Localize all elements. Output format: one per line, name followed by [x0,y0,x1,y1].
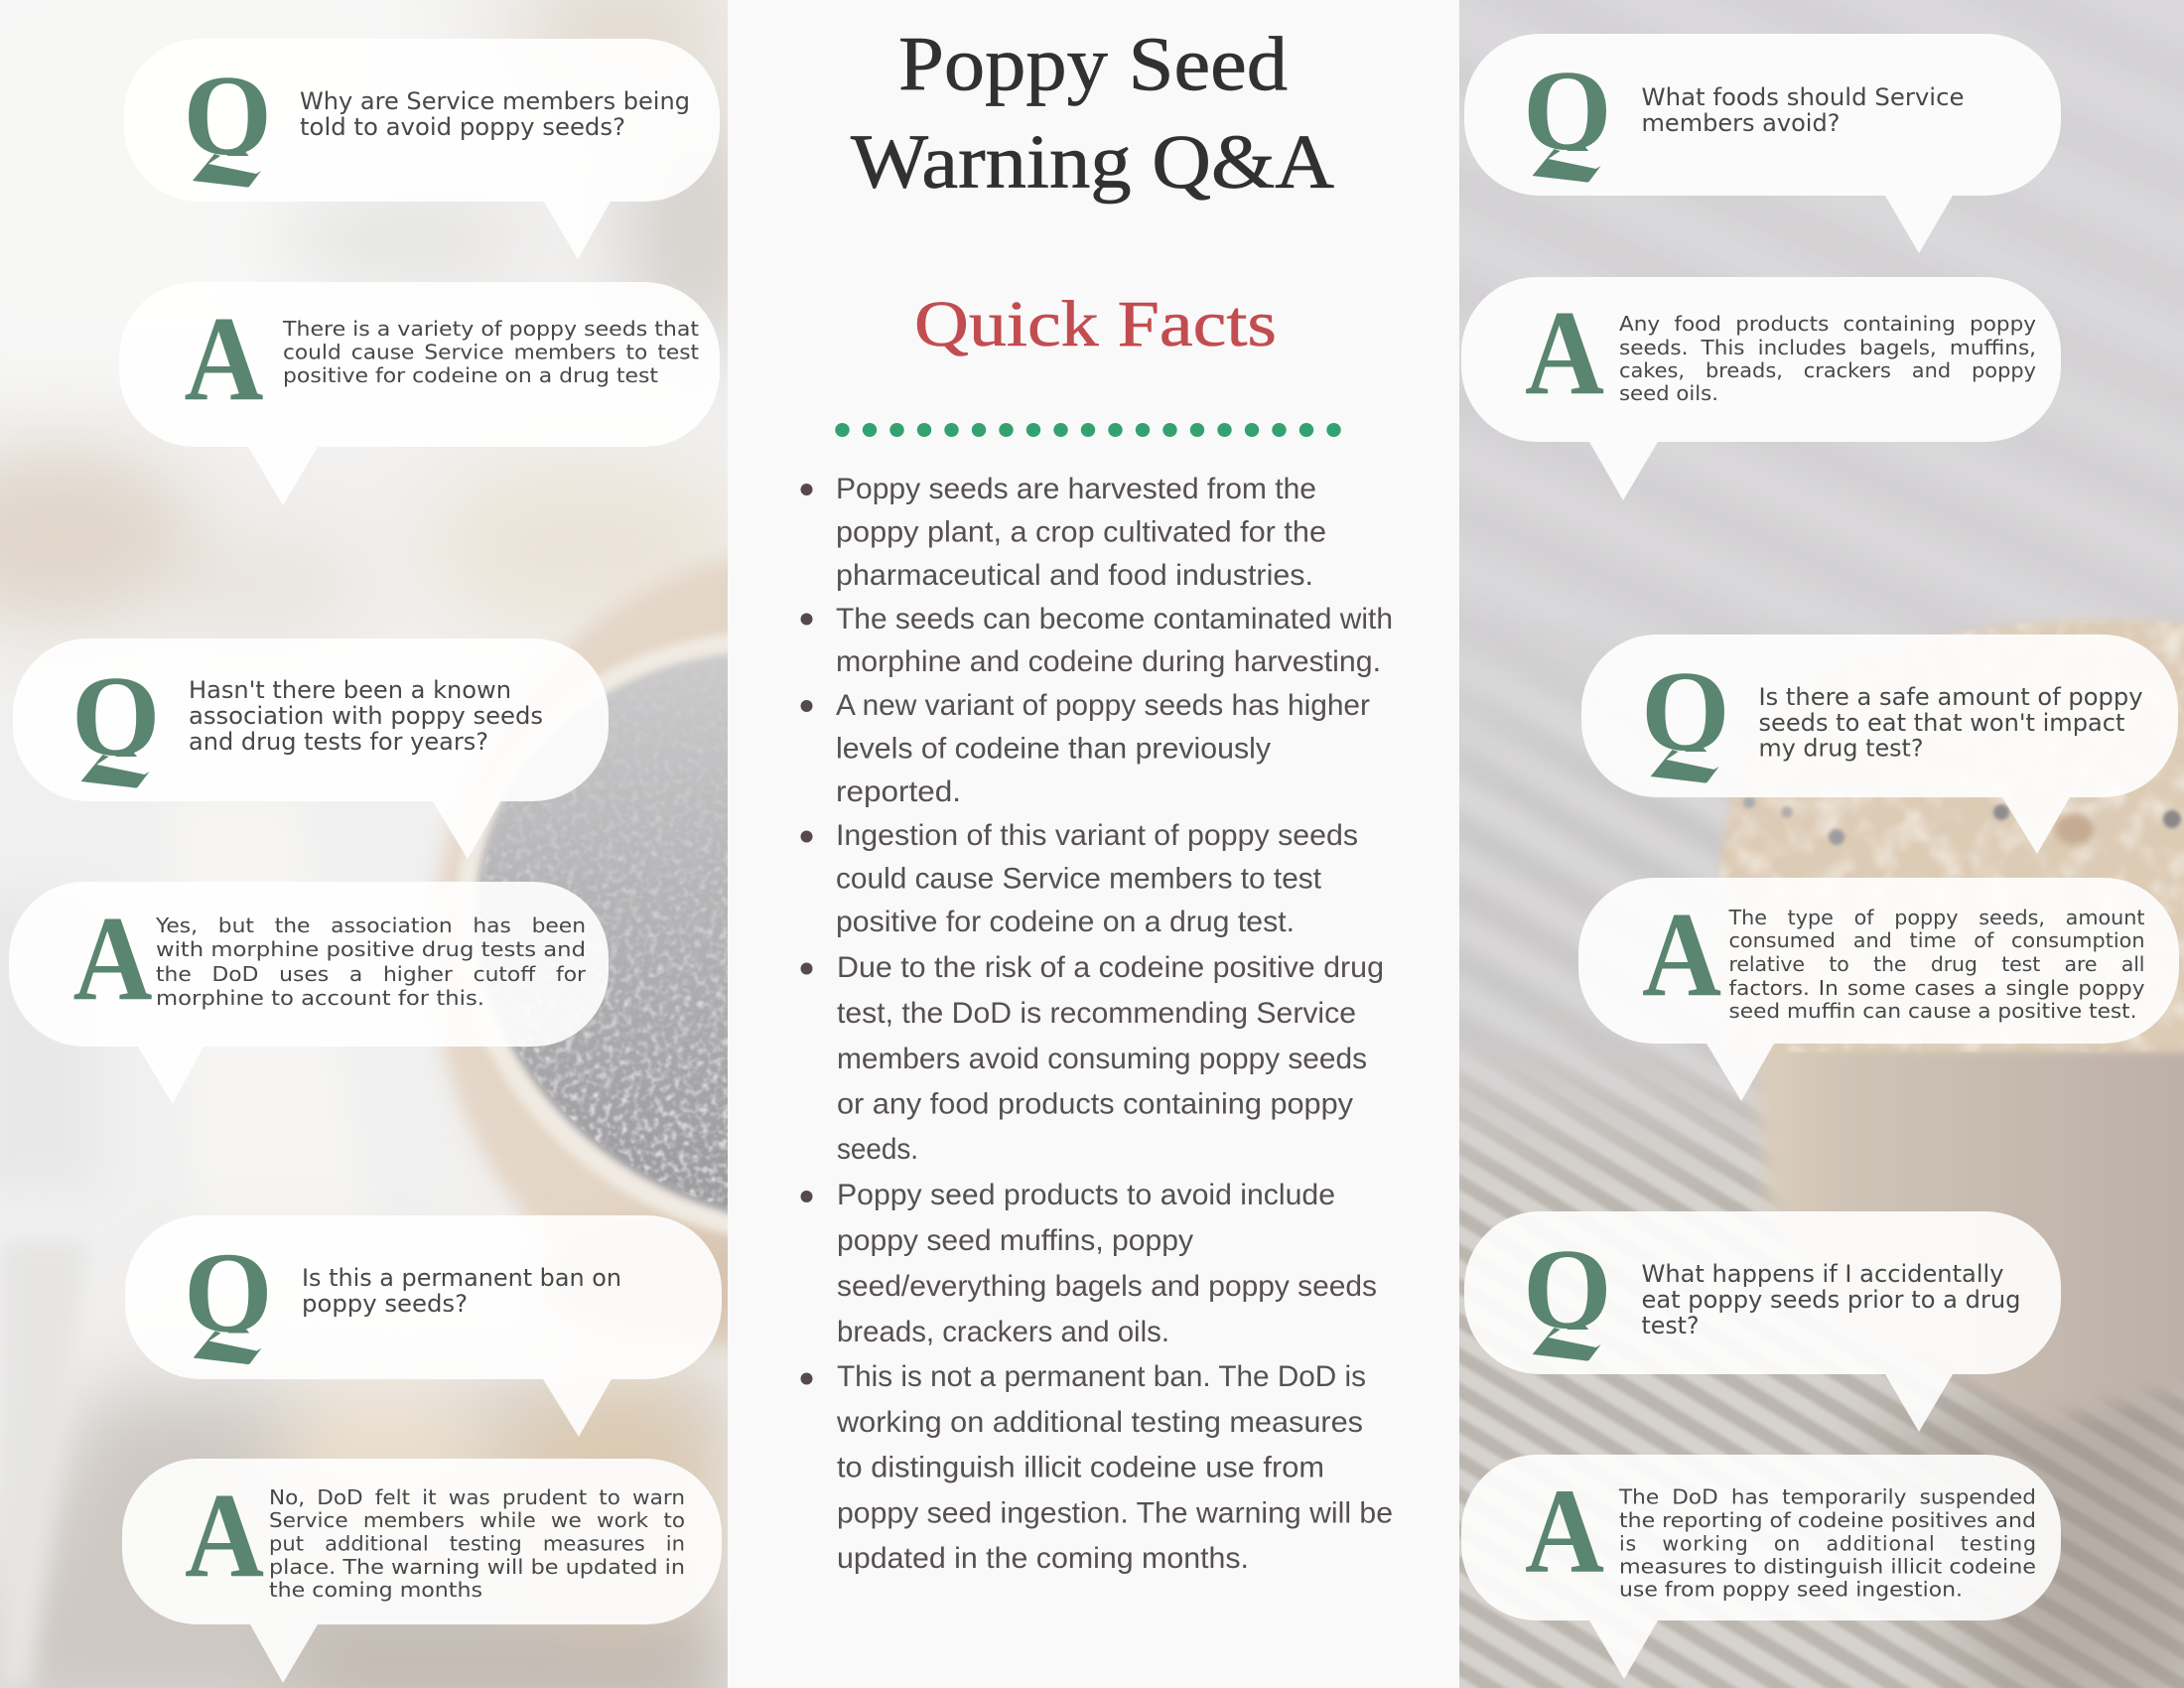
answer text: with morphine positive drug tests and [156,937,586,961]
speech bubble shape [9,882,609,1104]
bullet 7 [800,1360,1393,1575]
bullet 7: updated in the coming months. [837,1542,1249,1575]
bubble: permanent ban question [125,1215,722,1437]
Q mark: Q [1523,48,1612,174]
bullet 6 [800,1179,1377,1348]
question text: my drug test? [1759,735,1924,763]
bullet 6: seed/everything bagels and poppy seeds [837,1270,1377,1303]
bubble: what foods question [1464,34,2061,253]
question text: and drug tests for years? [189,728,488,756]
Q mark: Q [1641,648,1730,774]
question text: seeds to eat that won't impact [1759,709,2124,737]
Q mark: Q [1523,1226,1612,1352]
answer text: seed oils. [1619,381,1718,405]
title [851,21,1334,205]
bullet 5 [800,951,1384,1166]
question text: Is this a permanent ban on [302,1264,621,1292]
speech bubble shape [119,282,720,505]
answer text [282,317,699,387]
answer text: seeds. This includes bagels, muffins, [1619,336,2036,359]
bubble: safe amount question [1581,634,2178,854]
answer text: put additional testing measures in [269,1531,685,1555]
bubble: Why are Service members being told [124,39,720,259]
answer text: Any food products containing poppy [1619,312,2036,336]
question text [1642,1260,2021,1339]
dotted divider [835,423,1341,437]
answer text: could cause Service members to test [283,340,699,363]
question text: Is there a safe amount of poppy [1759,683,2142,711]
question text [189,676,543,756]
bullet 6: breads, crackers and oils. [837,1316,1169,1348]
bullet 2: The seeds can become contaminated with [836,603,1393,635]
answer text: the DoD uses a higher cutoff for [156,962,587,986]
bullet 4: positive for codeine on a drug test. [836,906,1295,938]
title: Warning Q&A [851,119,1334,205]
question text [1642,83,1964,137]
bubble: accidental eating answer [1461,1455,2061,1679]
bullet 5: or any food products containing poppy [837,1088,1353,1120]
bullet 7: working on additional testing measures [836,1406,1363,1439]
answer text: the coming months [269,1578,482,1602]
answer text: use from poppy seed ingestion. [1619,1577,1963,1601]
speech bubble shape [1464,1211,2061,1432]
answer text: consumed and time of consumption [1729,928,2144,952]
Q mark: Q [71,653,160,779]
answer text: The DoD has temporarily suspended [1618,1485,2036,1509]
bullet 7: poppy seed ingestion. The warning will be [837,1497,1393,1529]
A mark: A [185,292,264,426]
A mark: A [1525,286,1604,420]
answer text: There is a variety of poppy seeds that [282,317,699,341]
speech bubble shape [13,638,609,859]
bullet 4: Ingestion of this variant of poppy seeds [836,819,1358,852]
speech bubble shape [1461,277,2061,500]
bullet 1: pharmaceutical and food industries. [836,559,1313,592]
bullet 7: This is not a permanent ban. The DoD is [837,1360,1366,1393]
bullet 5: test, the DoD is recommending Service [837,997,1356,1030]
speech bubble shape [122,1459,722,1683]
bullet 4 [800,819,1358,938]
speech bubble shape [1578,878,2179,1101]
bubble: accidental eating question [1464,1211,2061,1432]
Q mark: Q [184,1229,273,1356]
bubble: permanent ban answer [122,1459,722,1683]
A mark: A [1642,888,1721,1022]
bubble: what foods answer [1461,277,2061,500]
answer text: cakes, breads, crackers and poppy [1619,358,2036,382]
answer text: The type of poppy seeds, amount [1727,906,2144,929]
question text [300,87,690,141]
answer text: morphine to account for this. [156,986,484,1010]
bullet 3: A new variant of poppy seeds has higher [836,689,1370,722]
answer text [1619,312,2036,405]
speech bubble shape [125,1215,722,1437]
photo: poppy seed muffin background [1390,0,2184,1688]
Q mark: Q [183,53,272,179]
bubble: variety of poppy seeds answer [119,282,720,505]
photo: poppy seed bowl background [0,0,728,1688]
A mark: A [185,1469,264,1603]
title: Poppy Seed [898,21,1288,106]
bullet 5: Due to the risk of a codeine positive drug [837,951,1384,984]
answer text: the reporting of codeine positives and [1619,1508,2036,1532]
answer text [269,1485,685,1602]
answer text: is working on additional testing [1619,1531,2036,1555]
question text: poppy seeds? [302,1290,468,1318]
question text: Why are Service members being [300,87,690,115]
bullet 6: poppy seed muffins, poppy [837,1224,1193,1257]
question text: What happens if I accidentally [1642,1260,2003,1288]
bullet 5: seeds. [837,1133,918,1166]
bullet 7: to distinguish illicit codeine use from [837,1452,1324,1483]
speech bubble shape [1461,1455,2061,1679]
answer text [155,914,587,1010]
bullet list: quick facts [800,473,1393,1575]
answer text [1727,906,2144,1023]
bullet 3 [800,689,1370,808]
question text: What foods should Service [1642,83,1964,111]
speech bubble shape [1464,34,2061,253]
bullet 2 [800,603,1393,678]
question text: test? [1642,1312,1700,1339]
answer text: Service members while we work to [269,1508,685,1532]
bubble: known association question [13,638,609,859]
heading: Quick Facts: Quick Facts [914,288,1277,360]
question text [302,1264,621,1318]
bullet 2: morphine and codeine during harvesting. [836,645,1381,678]
bullet 3: reported. [836,775,961,808]
question text: eat poppy seeds prior to a drug [1642,1286,2021,1314]
bullet 4: could cause Service members to test [836,862,1322,896]
bullet 1: Poppy seeds are harvested from the [836,473,1316,505]
question text: association with poppy seeds [189,702,543,730]
bullet 5: members avoid consuming poppy seeds [837,1043,1367,1075]
speech bubble shape [1581,634,2178,854]
question text: told to avoid poppy seeds? [300,113,625,141]
answer text: place. The warning will be updated in [269,1555,685,1579]
question text: Hasn't there been a known [189,676,511,704]
answer text [1618,1485,2036,1601]
answer text: Yes, but the association has been [155,914,586,937]
A mark: A [73,892,153,1026]
bullet 6: Poppy seed products to avoid include [837,1179,1335,1211]
speech bubble shape [124,39,720,259]
answer text: seed muffin can cause a positive test. [1729,999,2136,1023]
question text: members avoid? [1642,109,1841,137]
A mark: A [1525,1464,1604,1599]
answer text: No, DoD felt it was prudent to warn [269,1485,685,1509]
answer text: positive for codeine on a drug test [283,363,658,387]
answer text: measures to distinguish illicit codeine [1619,1555,2036,1579]
answer text: relative to the drug test are all [1729,952,2144,976]
bubble: association answer [9,882,609,1104]
bullet 3: levels of codeine than previously [836,733,1271,765]
bullet 1: poppy plant, a crop cultivated for the [836,516,1326,548]
answer text: factors. In some cases a single poppy [1729,976,2144,1000]
bullet 1 [800,473,1326,592]
question text [1759,683,2142,763]
bubble: safe amount answer [1578,878,2179,1101]
